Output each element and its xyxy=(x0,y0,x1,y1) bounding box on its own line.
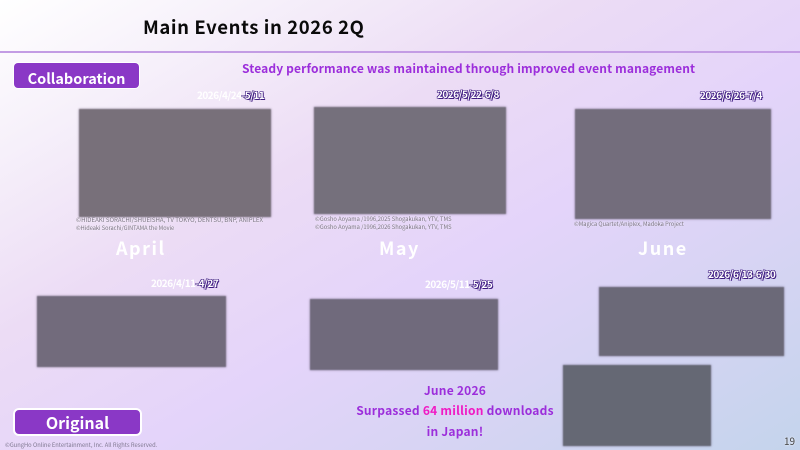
date: April original: 2026/4/11-4/27 xyxy=(151,275,218,290)
date: May original: 2026/5/11-5/25 xyxy=(425,276,492,291)
credit: April: ©HIDEAKI SORACHI/SHUEISHA, TV TOKYO, DENTSU, BNP, ANIPLEX xyxy=(76,215,263,224)
date: June collaboration: 2026/6/26-7/4 xyxy=(700,87,762,102)
credit: May: ©Gosho Aoyama /1996,2026 Shogakukan, YTV, TMS xyxy=(315,222,452,231)
credit: June: ©Magica Quartet/Aniplex, Madoka Project xyxy=(574,219,684,228)
panel: June collaboration image xyxy=(575,109,771,219)
page number: 19 xyxy=(784,433,795,448)
credit: May: ©Gosho Aoyama /1996,2025 Shogakukan, YTV, TMS xyxy=(315,214,452,223)
callout line: date: June 2026 xyxy=(424,382,486,399)
panel: June original image two xyxy=(563,365,711,446)
panel: April original image xyxy=(37,296,226,367)
badge: Original xyxy=(13,408,142,436)
date: May collaboration: 2026/5/22-6/8 xyxy=(437,86,499,101)
callout: downloads milestone xyxy=(356,382,554,440)
subtitle: Steady performance was maintained through improved event management xyxy=(242,60,695,77)
credit: May xyxy=(315,214,452,231)
date: April collaboration: 2026/4/24-5/11 xyxy=(197,87,264,102)
month: April: April xyxy=(116,235,166,261)
panel: May collaboration image xyxy=(314,107,506,214)
title: Main Events in 2026 2Q xyxy=(143,14,364,40)
callout line: Japan: in Japan! xyxy=(427,423,483,440)
copyright: ©GungHo Online Entertainment, Inc. All Rights Reserved. xyxy=(5,440,157,449)
panel: May original image xyxy=(310,299,498,370)
badge: Collaboration xyxy=(14,63,139,88)
callout line: downloads: Surpassed 64 million downloads xyxy=(356,402,554,419)
title divider xyxy=(0,51,800,53)
month: May: May xyxy=(379,235,420,261)
panel: June original image one xyxy=(599,287,784,356)
credit: April xyxy=(76,215,263,232)
credit: April: ©Hideaki Sorachi/GINTAMA the Movie xyxy=(76,224,174,232)
month: June: June xyxy=(638,235,688,261)
panel: April collaboration image xyxy=(79,109,271,217)
badge: Original: Original xyxy=(46,410,109,434)
date: June original: 2026/6/13-6/30 xyxy=(708,266,775,281)
